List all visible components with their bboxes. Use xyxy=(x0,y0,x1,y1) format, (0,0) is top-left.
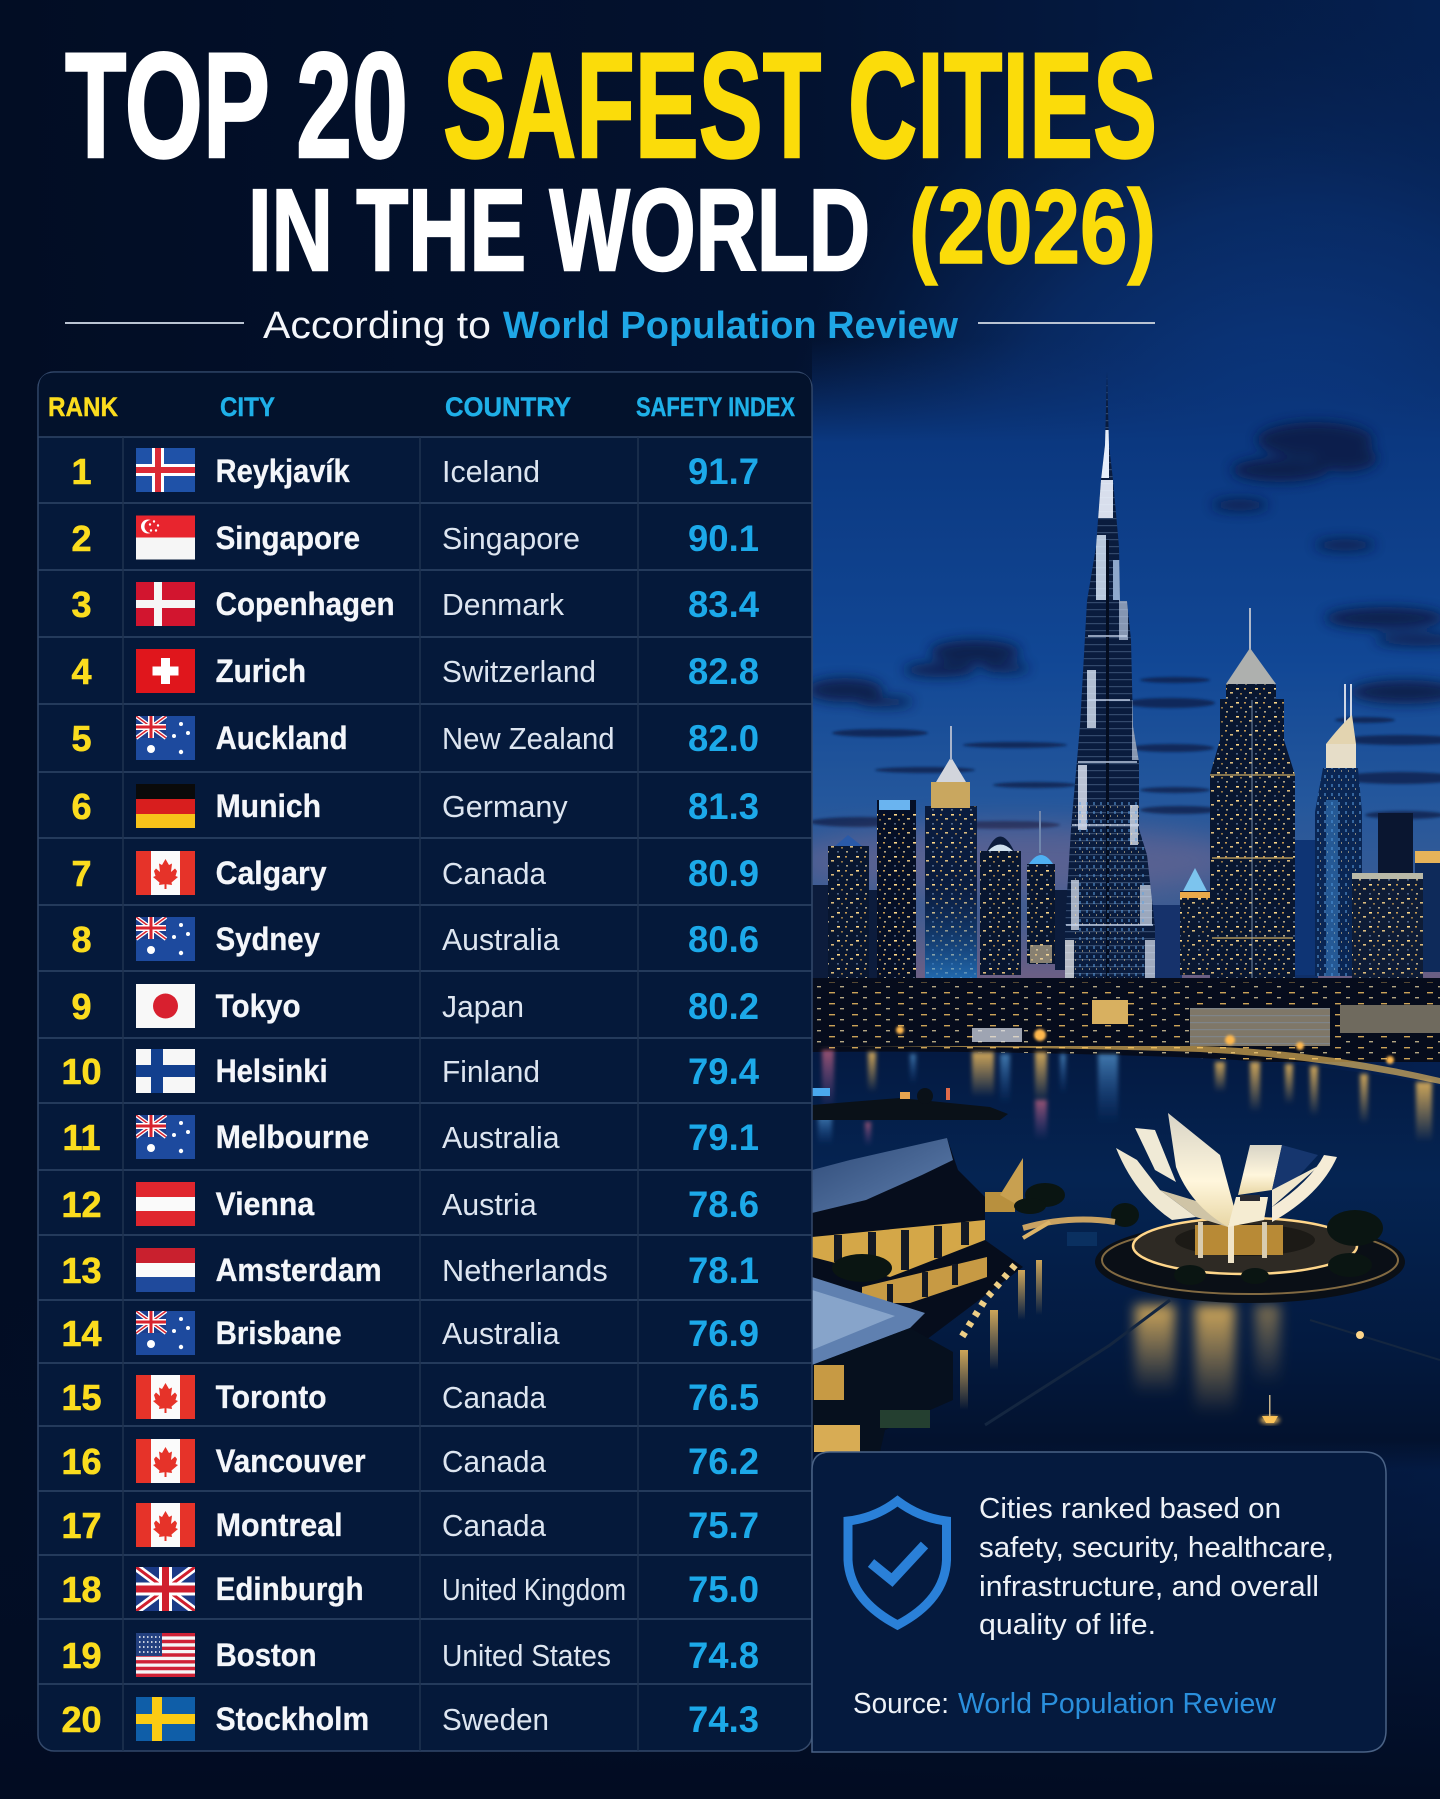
row 15: 76.5 xyxy=(688,1377,759,1418)
table header xyxy=(48,392,795,422)
row 1: 91.7 xyxy=(688,451,759,492)
row 7: 7 xyxy=(71,853,92,894)
title line 2: year: (2026) xyxy=(909,169,1156,286)
row 10: 10 xyxy=(61,1051,102,1092)
row 10: Finland xyxy=(442,1054,540,1089)
row 19 xyxy=(61,1633,759,1677)
row 19: 74.8 xyxy=(688,1635,759,1676)
row 16: Canada xyxy=(442,1444,547,1479)
row 18 xyxy=(61,1567,759,1611)
source line: World Population Review xyxy=(958,1688,1277,1720)
row 4: 4 xyxy=(71,651,92,692)
row 9: Tokyo xyxy=(216,988,301,1024)
row 8: 8 xyxy=(71,919,92,960)
panel: ranking table xyxy=(38,372,812,1751)
row 15 xyxy=(61,1375,759,1419)
row 4: Zurich xyxy=(216,653,306,689)
row 20: 74.3 xyxy=(688,1699,759,1740)
row 5: Auckland xyxy=(216,720,348,756)
row 1 xyxy=(71,448,759,492)
subtitle: According to xyxy=(263,305,491,347)
row 19: 19 xyxy=(61,1635,102,1676)
row 3: Denmark xyxy=(442,587,564,622)
row 5: 5 xyxy=(71,718,92,759)
row 20: Stockholm xyxy=(216,1701,369,1737)
row 6: 6 xyxy=(71,786,92,827)
row 9: Japan xyxy=(442,989,524,1024)
small island xyxy=(812,1088,1008,1120)
main supertall tower xyxy=(1065,375,1155,978)
row 2: 2 xyxy=(71,518,92,559)
row 4 xyxy=(71,649,759,693)
row 2: Singapore xyxy=(442,521,580,556)
row 2 xyxy=(71,516,759,560)
row 7: Calgary xyxy=(216,855,327,891)
title line 2: white: IN THE WORLD xyxy=(248,165,870,295)
note text: infrastructure, and overall xyxy=(979,1571,1319,1603)
row 17 xyxy=(61,1503,759,1547)
table header: COUNTRY xyxy=(445,392,571,422)
table header: RANK xyxy=(48,392,118,422)
row 17: 75.7 xyxy=(688,1505,759,1546)
table header: SAFETY INDEX xyxy=(636,392,795,422)
row 4: 82.8 xyxy=(688,651,759,692)
row 7: 80.9 xyxy=(688,853,759,894)
lotus reflection xyxy=(1135,1305,1280,1415)
row 7: Canada xyxy=(442,856,547,891)
row 11: 79.1 xyxy=(688,1117,759,1158)
row 14: 76.9 xyxy=(688,1313,759,1354)
row 15: 15 xyxy=(61,1377,102,1418)
row 6 xyxy=(71,784,759,828)
grid lines xyxy=(38,437,812,1751)
row 1: Reykjavík xyxy=(216,453,350,489)
row 16: Vancouver xyxy=(216,1443,366,1479)
row 16: 16 xyxy=(61,1441,102,1482)
row 16 xyxy=(61,1439,759,1483)
row 10 xyxy=(61,1049,759,1093)
row 6: Munich xyxy=(216,788,321,824)
row 3: 3 xyxy=(71,584,92,625)
row 19: United States xyxy=(442,1638,611,1673)
row 5: 82.0 xyxy=(688,718,759,759)
distant low buildings xyxy=(812,885,1318,978)
row 17: Montreal xyxy=(216,1507,343,1543)
row 17: 17 xyxy=(61,1505,102,1546)
row 13: Amsterdam xyxy=(216,1252,382,1288)
row 13: 13 xyxy=(61,1250,102,1291)
row 12: Austria xyxy=(442,1187,537,1222)
row 19: Boston xyxy=(216,1637,317,1673)
row 13: Netherlands xyxy=(442,1253,608,1288)
row 11: 11 xyxy=(62,1117,101,1158)
row 20: 20 xyxy=(61,1699,102,1740)
row 11 xyxy=(62,1115,759,1159)
pavilion roof xyxy=(812,1138,953,1213)
row 1: 1 xyxy=(71,451,92,492)
row 8 xyxy=(71,917,759,961)
note text xyxy=(979,1493,1334,1641)
row 2: 90.1 xyxy=(688,518,759,559)
window band lower xyxy=(862,1257,987,1303)
row 11: Melbourne xyxy=(216,1119,369,1155)
row 14: 14 xyxy=(61,1313,102,1354)
table header: CITY xyxy=(220,392,275,422)
right skyline towers xyxy=(1180,608,1440,1007)
clouds xyxy=(807,422,1440,829)
row 16: 76.2 xyxy=(688,1441,759,1482)
row 15: Canada xyxy=(442,1380,547,1415)
row 3 xyxy=(71,582,759,626)
row 6: Germany xyxy=(442,789,568,824)
row 12: 78.6 xyxy=(688,1184,759,1225)
window band upper xyxy=(812,1220,985,1277)
row 2: Singapore xyxy=(216,520,360,556)
source line: Source: xyxy=(853,1688,949,1720)
sky xyxy=(812,340,1440,980)
title line 1: white: TOP 20 xyxy=(65,21,408,189)
row 20: Sweden xyxy=(442,1702,549,1737)
horizon glow xyxy=(790,825,1250,895)
row 7 xyxy=(71,851,759,895)
row 18: United Kingdom xyxy=(442,1572,626,1607)
row 14: Australia xyxy=(442,1316,560,1351)
row 18: Edinburgh xyxy=(216,1571,364,1607)
note text: Cities ranked based on xyxy=(979,1493,1281,1525)
row 12: Vienna xyxy=(216,1186,314,1222)
row 1: Iceland xyxy=(442,454,540,489)
row 20 xyxy=(61,1697,759,1741)
row 3: Copenhagen xyxy=(216,586,395,622)
row 13: 78.1 xyxy=(688,1250,759,1291)
row 10: Helsinki xyxy=(216,1053,328,1089)
row 9: 80.2 xyxy=(688,986,759,1027)
row 8: Australia xyxy=(442,922,560,957)
note text: safety, security, healthcare, xyxy=(979,1532,1334,1564)
row 6: 81.3 xyxy=(688,786,759,827)
row 17: Canada xyxy=(442,1508,547,1543)
row 5: New Zealand xyxy=(442,721,615,756)
row 9 xyxy=(71,984,759,1028)
row 18: 75.0 xyxy=(688,1569,759,1610)
row 8: 80.6 xyxy=(688,919,759,960)
row 13 xyxy=(61,1248,759,1292)
row 14 xyxy=(61,1311,759,1355)
subtitle: World Population Review xyxy=(503,305,958,347)
note text: quality of life. xyxy=(979,1609,1156,1641)
row 3: 83.4 xyxy=(688,584,759,625)
row 14: Brisbane xyxy=(216,1315,342,1351)
row 18: 18 xyxy=(61,1569,102,1610)
bay water xyxy=(812,1052,1440,1470)
panel: methodology note xyxy=(812,1452,1386,1752)
light reflections xyxy=(818,1050,1432,1146)
icon: shield with check xyxy=(848,1501,946,1625)
subtitle xyxy=(65,305,1155,347)
trees xyxy=(1111,1203,1383,1276)
lotus petals xyxy=(1238,1145,1282,1195)
left skyline towers xyxy=(828,726,1055,983)
row 12: 12 xyxy=(61,1184,102,1225)
title xyxy=(65,21,1157,295)
row 9: 9 xyxy=(71,986,92,1027)
row 12 xyxy=(61,1182,759,1226)
row 4: Switzerland xyxy=(442,654,596,689)
waterfront band xyxy=(812,978,1440,1084)
footbridge xyxy=(1023,1220,1115,1228)
lotus platform xyxy=(1095,1232,1405,1303)
row 11: Australia xyxy=(442,1120,560,1155)
curved waterfront pavilions xyxy=(812,1138,1115,1410)
row 15: Toronto xyxy=(216,1379,327,1415)
long jetty and boat xyxy=(985,1300,1440,1425)
lotus museum xyxy=(1095,1113,1405,1415)
photo: night skyline and bay xyxy=(790,340,1440,1470)
row 8: Sydney xyxy=(216,921,320,957)
row 10: 79.4 xyxy=(688,1051,759,1092)
row 5 xyxy=(71,716,759,760)
